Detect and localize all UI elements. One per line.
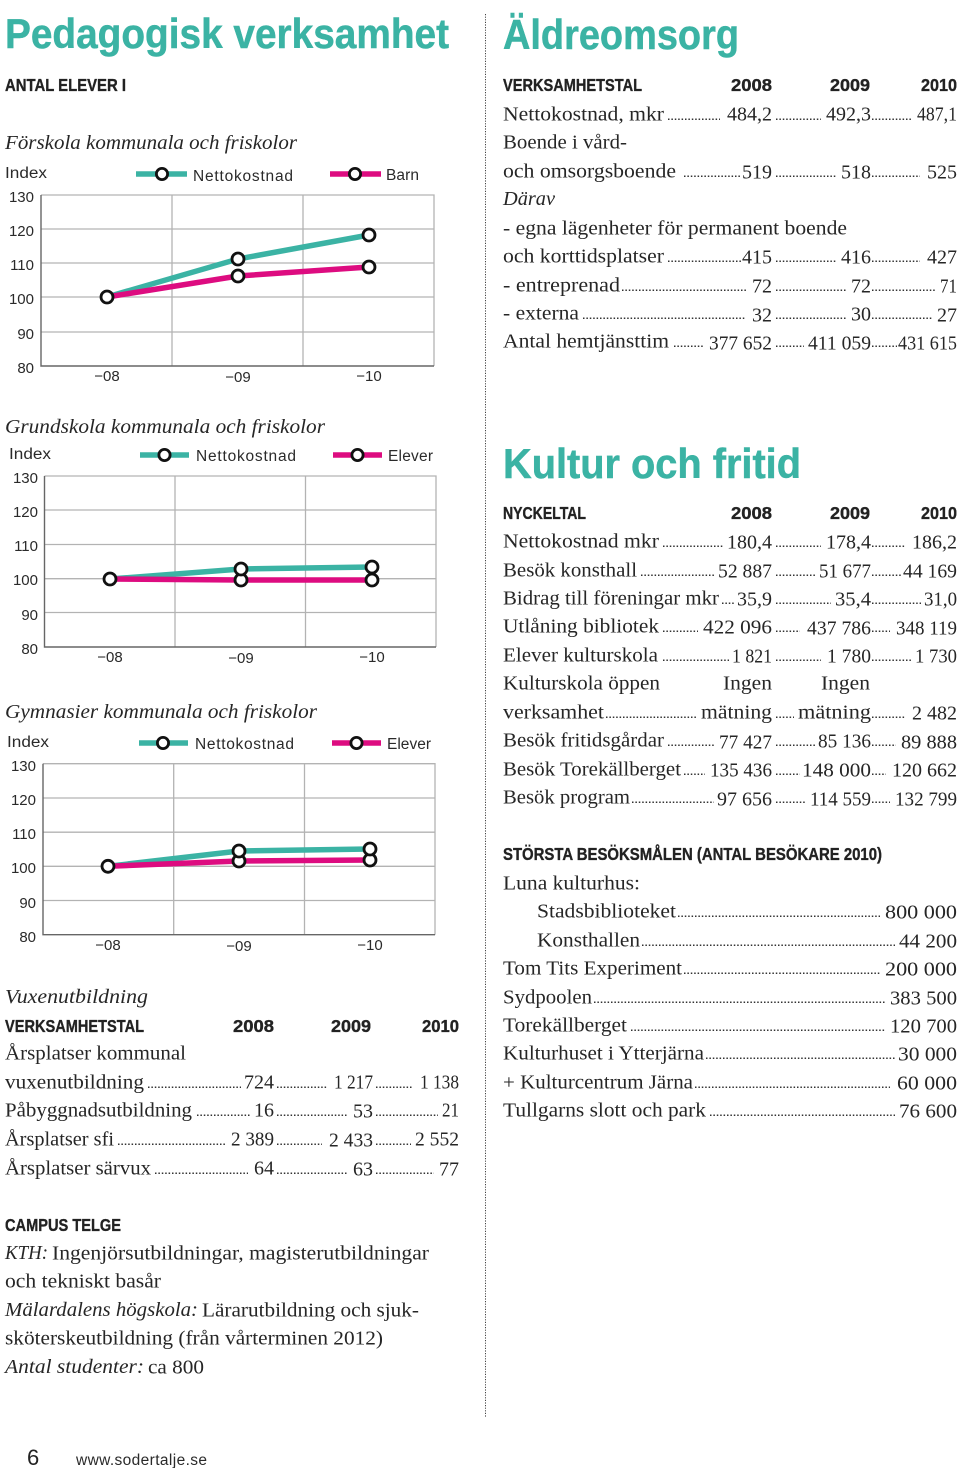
- line chart: Förskola: −09: [225, 369, 251, 386]
- line chart: Förskola: 130: [9, 189, 34, 206]
- table: Största besöksmålen: 30 000: [898, 1044, 957, 1066]
- table: Äldreomsorg: 416: [841, 246, 871, 268]
- table: Vuxenutbildning: 77: [439, 1158, 459, 1180]
- line chart: Grundskola: 130: [13, 470, 38, 487]
- table: Äldreomsorg: 519: [742, 162, 772, 184]
- text block: Campus Telge: och tekniskt basår: [5, 1270, 161, 1292]
- table: Nyckeltal: verksamhet: [503, 702, 604, 724]
- heading: Äldreomsorg: Äldreomsorg: [503, 11, 739, 58]
- table: Äldreomsorg: 492,3: [826, 104, 871, 126]
- line chart: Gymnasier: Index: [7, 734, 49, 751]
- table: Nyckeltal: 422 096: [703, 616, 772, 638]
- table header: [503, 503, 957, 523]
- table header: 2010: [921, 503, 957, 523]
- table: Vuxenutbildning: 724: [244, 1072, 274, 1094]
- table: Nyckeltal: 132 799: [895, 788, 957, 810]
- line chart: Förskola: −08: [94, 368, 120, 385]
- table: Största besöksmålen: Kulturhuset i Ytterjärna: [503, 1042, 704, 1064]
- legend: Barn: [330, 167, 419, 184]
- table: Äldreomsorg: 32: [752, 304, 772, 326]
- table: Nyckeltal: Kulturskola öppen: [503, 672, 660, 694]
- text block: Campus Telge: [3, 1215, 429, 1378]
- table: Äldreomsorg: - entreprenad: [503, 274, 620, 296]
- table: Nyckeltal: Besök program: [503, 786, 630, 808]
- table: Största besöksmålen: 44 200: [899, 930, 957, 952]
- table: Nyckeltal: 1 730: [915, 646, 957, 668]
- legend: Nettokostnad: Nettokostnad: [193, 168, 293, 185]
- line chart: Gymnasier: −10: [357, 937, 383, 954]
- table: Nyckeltal: 97 656: [717, 788, 772, 810]
- table header: 2008: [731, 503, 772, 523]
- table: Vuxenutbildning: vuxenutbildning: [5, 1072, 144, 1094]
- table: Vuxenutbildning: Årsplatser särvux: [5, 1158, 151, 1180]
- table: Äldreomsorg: och omsorgsboende: [503, 160, 676, 182]
- table: Nyckeltal: 85 136: [818, 730, 871, 752]
- text block: Campus Telge: Antal studenter:: [3, 1356, 144, 1378]
- table: Äldreomsorg: 427: [927, 246, 957, 268]
- table header: 2010: [422, 1016, 459, 1036]
- line chart: Grundskola: Index: [9, 446, 51, 463]
- table: Nyckeltal: 31,0: [924, 588, 957, 610]
- line chart: Grundskola: 90: [21, 607, 38, 624]
- line chart: Förskola: [5, 165, 434, 386]
- table: Nyckeltal: 437 786: [807, 618, 871, 640]
- line chart: Grundskola: 120: [13, 504, 38, 521]
- table: Äldreomsorg: och korttidsplatser: [503, 246, 664, 268]
- table header: 2008: [731, 75, 772, 95]
- table header: [5, 1016, 459, 1036]
- text block: Campus Telge: ca 800: [148, 1356, 204, 1378]
- table: Vuxenutbildning: 2 552: [415, 1128, 459, 1150]
- text block: Campus Telge: Lärarutbildning och sjuk-: [202, 1300, 419, 1322]
- line chart: Grundskola: 80: [21, 641, 38, 658]
- table: Äldreomsorg: 71: [940, 276, 957, 298]
- table: Äldreomsorg: Därav: [502, 188, 556, 210]
- line chart: Gymnasier: −09: [226, 938, 252, 955]
- table: Nyckeltal: Nettokostnad mkr: [503, 530, 659, 552]
- table header: VERKSAMHETSTAL: [5, 1016, 144, 1036]
- table: Nyckeltal: 114 559: [810, 788, 871, 810]
- table: Största besöksmålen: Sydpoolen: [503, 986, 592, 1008]
- line chart: Förskola: 100: [9, 291, 34, 308]
- table: Äldreomsorg: 30: [851, 304, 871, 326]
- table: Äldreomsorg: 518: [841, 162, 871, 184]
- line chart: Grundskola: 100: [13, 572, 38, 589]
- table: Nyckeltal: mätning: [701, 702, 772, 724]
- table: Nyckeltal: Besök konsthall: [503, 560, 637, 582]
- heading: Kultur och fritid: Kultur och fritid: [503, 440, 801, 487]
- table: Äldreomsorg: Nettokostnad, mkr: [503, 104, 664, 126]
- table: Nyckeltal: 186,2: [912, 532, 957, 554]
- table: Nyckeltal: 135 436: [710, 760, 772, 782]
- table: Nyckeltal: Utlåning bibliotek: [503, 616, 660, 638]
- table: Nyckeltal: 1 780: [827, 646, 871, 668]
- table: Nyckeltal: 35,9: [737, 588, 772, 610]
- table header: VERKSAMHETSTAL: [503, 75, 642, 95]
- legend: Elever: Elever: [388, 448, 433, 465]
- table: Största besöksmålen: Tom Tits Experiment: [503, 958, 682, 980]
- table: Största besöksmålen: + Kulturcentrum Järna: [503, 1072, 693, 1094]
- line chart: Gymnasier: −08: [95, 937, 121, 954]
- table: Nyckeltal: Ingen: [723, 672, 772, 694]
- table: Nyckeltal: Elever kulturskola: [503, 644, 658, 666]
- legend: Barn: Barn: [386, 167, 419, 184]
- table: Äldreomsorg: [502, 75, 957, 354]
- table: Nyckeltal: Ingen: [821, 672, 870, 694]
- line chart: Grundskola: [9, 446, 436, 667]
- table: Vuxenutbildning: Påbyggnadsutbildning: [5, 1100, 192, 1122]
- line chart: Grundskola: −09: [228, 650, 254, 667]
- table: Största besöksmålen: 120 700: [890, 1016, 957, 1038]
- line chart: Grundskola: −10: [359, 649, 385, 666]
- text block: Campus Telge: sköterskeutbildning (från vårterminen 2012): [5, 1328, 383, 1350]
- table: Nyckeltal: 35,4: [835, 588, 871, 610]
- table: Största besöksmålen: Konsthallen: [537, 930, 640, 952]
- table: Äldreomsorg: - egna lägenheter för permanent boende: [503, 218, 847, 240]
- legend: Nettokostnad: Nettokostnad: [196, 448, 296, 465]
- text block: Campus Telge: KTH:: [4, 1242, 48, 1264]
- line chart: Gymnasier: 100: [11, 860, 36, 877]
- line chart: Gymnasier: 80: [19, 929, 36, 946]
- table: Största besöksmålen: 76 600: [899, 1100, 957, 1122]
- table: Äldreomsorg: 484,2: [727, 104, 772, 126]
- table: Nyckeltal: [503, 503, 957, 810]
- table: Nyckeltal: 77 427: [719, 732, 772, 754]
- table: Största besöksmålen: 800 000: [885, 902, 957, 924]
- line chart: Förskola: 120: [9, 223, 34, 240]
- line chart: Gymnasier: 110: [12, 826, 36, 843]
- line chart: Grundskola: 110: [14, 538, 38, 555]
- table header: 2009: [830, 503, 870, 523]
- table: Vuxenutbildning: 2 433: [329, 1130, 373, 1152]
- table header: NYCKELTAL: [503, 503, 586, 523]
- line chart: Förskola: Index: [5, 165, 47, 182]
- line chart: Förskola: 110: [10, 257, 34, 274]
- text block: Campus Telge: Mälardalens högskola:: [4, 1299, 198, 1321]
- line chart: Gymnasier: 90: [19, 895, 36, 912]
- table: Största besöksmålen: 60 000: [897, 1072, 957, 1094]
- table: Nyckeltal: 44 169: [903, 560, 957, 582]
- table: Nyckeltal: 51 677: [819, 560, 871, 582]
- table: Vuxenutbildning: 53: [353, 1100, 373, 1122]
- table: Vuxenutbildning: Årsplatser sfi: [5, 1128, 114, 1150]
- table: Äldreomsorg: 411 059: [808, 332, 871, 354]
- table: Vuxenutbildning: Årsplatser kommunal: [5, 1042, 186, 1064]
- table: Vuxenutbildning: [5, 1016, 459, 1180]
- table: Vuxenutbildning: 1 217: [334, 1072, 373, 1094]
- table: Nyckeltal: Besök Torekällberget: [503, 758, 681, 780]
- line chart: Förskola: −10: [356, 368, 382, 385]
- table: Nyckeltal: 89 888: [901, 732, 957, 754]
- table: Äldreomsorg: Boende i vård-: [503, 132, 627, 154]
- table: Äldreomsorg: Antal hemtjänsttim: [503, 330, 669, 352]
- legend: Elever: [333, 448, 433, 465]
- table header: 2010: [921, 75, 957, 95]
- table header: 2009: [830, 75, 870, 95]
- table: Nyckeltal: Besök fritidsgårdar: [503, 730, 664, 752]
- table: Största besöksmålen: Stadsbiblioteket: [537, 900, 676, 922]
- table: Nyckeltal: 348 119: [896, 618, 957, 640]
- table: Vuxenutbildning: 1 138: [420, 1072, 459, 1094]
- table header: 2008: [233, 1016, 274, 1036]
- table: Äldreomsorg: 377 652: [709, 332, 772, 354]
- table: Nyckeltal: 178,4: [826, 532, 871, 554]
- table: Nyckeltal: 120 662: [892, 760, 957, 782]
- table: Äldreomsorg: 27: [937, 304, 957, 326]
- table: Nyckeltal: 1 821: [732, 646, 772, 668]
- table: Nyckeltal: mätning: [798, 702, 871, 724]
- legend: Elever: Elever: [387, 736, 431, 753]
- table: Största besöksmålen: Tullgarns slott och park: [503, 1100, 707, 1122]
- table: Största besöksmålen: 200 000: [885, 958, 957, 980]
- text block: Campus Telge: CAMPUS TELGE: [5, 1215, 121, 1235]
- line chart: Gymnasier: 130: [11, 758, 36, 775]
- table: Äldreomsorg: 415: [742, 246, 772, 268]
- table: Vuxenutbildning: 63: [353, 1158, 373, 1180]
- table: Största besöksmålen: Luna kulturhus:: [503, 872, 640, 894]
- table: Nyckeltal: 180,4: [727, 532, 772, 554]
- table: Vuxenutbildning: 16: [254, 1100, 274, 1122]
- table header: [503, 75, 957, 95]
- table: Vuxenutbildning: 2 389: [231, 1128, 274, 1150]
- table: Äldreomsorg: 72: [752, 276, 772, 298]
- line chart: Grundskola: −08: [97, 649, 123, 666]
- table header: 2009: [331, 1016, 371, 1036]
- table: Nyckeltal: 148 000: [802, 760, 871, 782]
- table: Största besöksmålen: [503, 844, 957, 1122]
- chart title: Gymnasier: Gymnasier kommunala och friskolor: [5, 701, 318, 723]
- subheading: Vuxenutbildning: Vuxenutbildning: [5, 986, 148, 1008]
- subheading: Antal elever i: ANTAL ELEVER I: [5, 75, 126, 95]
- legend: Nettokostnad: Nettokostnad: [195, 736, 294, 753]
- table: Vuxenutbildning: 21: [442, 1100, 459, 1122]
- table: Nyckeltal: Bidrag till föreningar mkr: [503, 588, 719, 610]
- line chart: Förskola: 90: [17, 326, 34, 343]
- heading: Pedagogisk verksamhet: Pedagogisk verksamhet: [5, 10, 449, 57]
- line chart: Gymnasier: 120: [11, 792, 36, 809]
- table: Största besöksmålen: Torekällberget: [503, 1014, 627, 1036]
- table: Äldreomsorg: 525: [927, 162, 957, 184]
- legend: Nettokostnad: [140, 448, 296, 465]
- table: Vuxenutbildning: 64: [254, 1158, 274, 1180]
- text block: Campus Telge: Ingenjörsutbildningar, magisterutbildningar: [52, 1242, 429, 1264]
- table: Nyckeltal: 52 887: [718, 560, 772, 582]
- table: Äldreomsorg: - externa: [503, 302, 579, 324]
- legend: Nettokostnad: [136, 168, 293, 185]
- legend: Nettokostnad: [139, 736, 294, 753]
- chart title: Grundskola: Grundskola kommunala och friskolor: [5, 416, 326, 438]
- line chart: Förskola: 80: [17, 360, 34, 377]
- legend: Elever: [332, 736, 431, 753]
- line chart: Gymnasier: [7, 734, 435, 955]
- table: Nyckeltal: 2 482: [912, 702, 957, 724]
- table: Äldreomsorg: 72: [851, 276, 871, 298]
- table: Största besöksmålen: 383 500: [890, 988, 957, 1010]
- chart title: Förskola: Förskola kommunala och friskolor: [4, 132, 298, 154]
- table: Största besöksmålen: STÖRSTA BESÖKSMÅLEN (ANTAL BESÖKARE 2010): [503, 844, 882, 864]
